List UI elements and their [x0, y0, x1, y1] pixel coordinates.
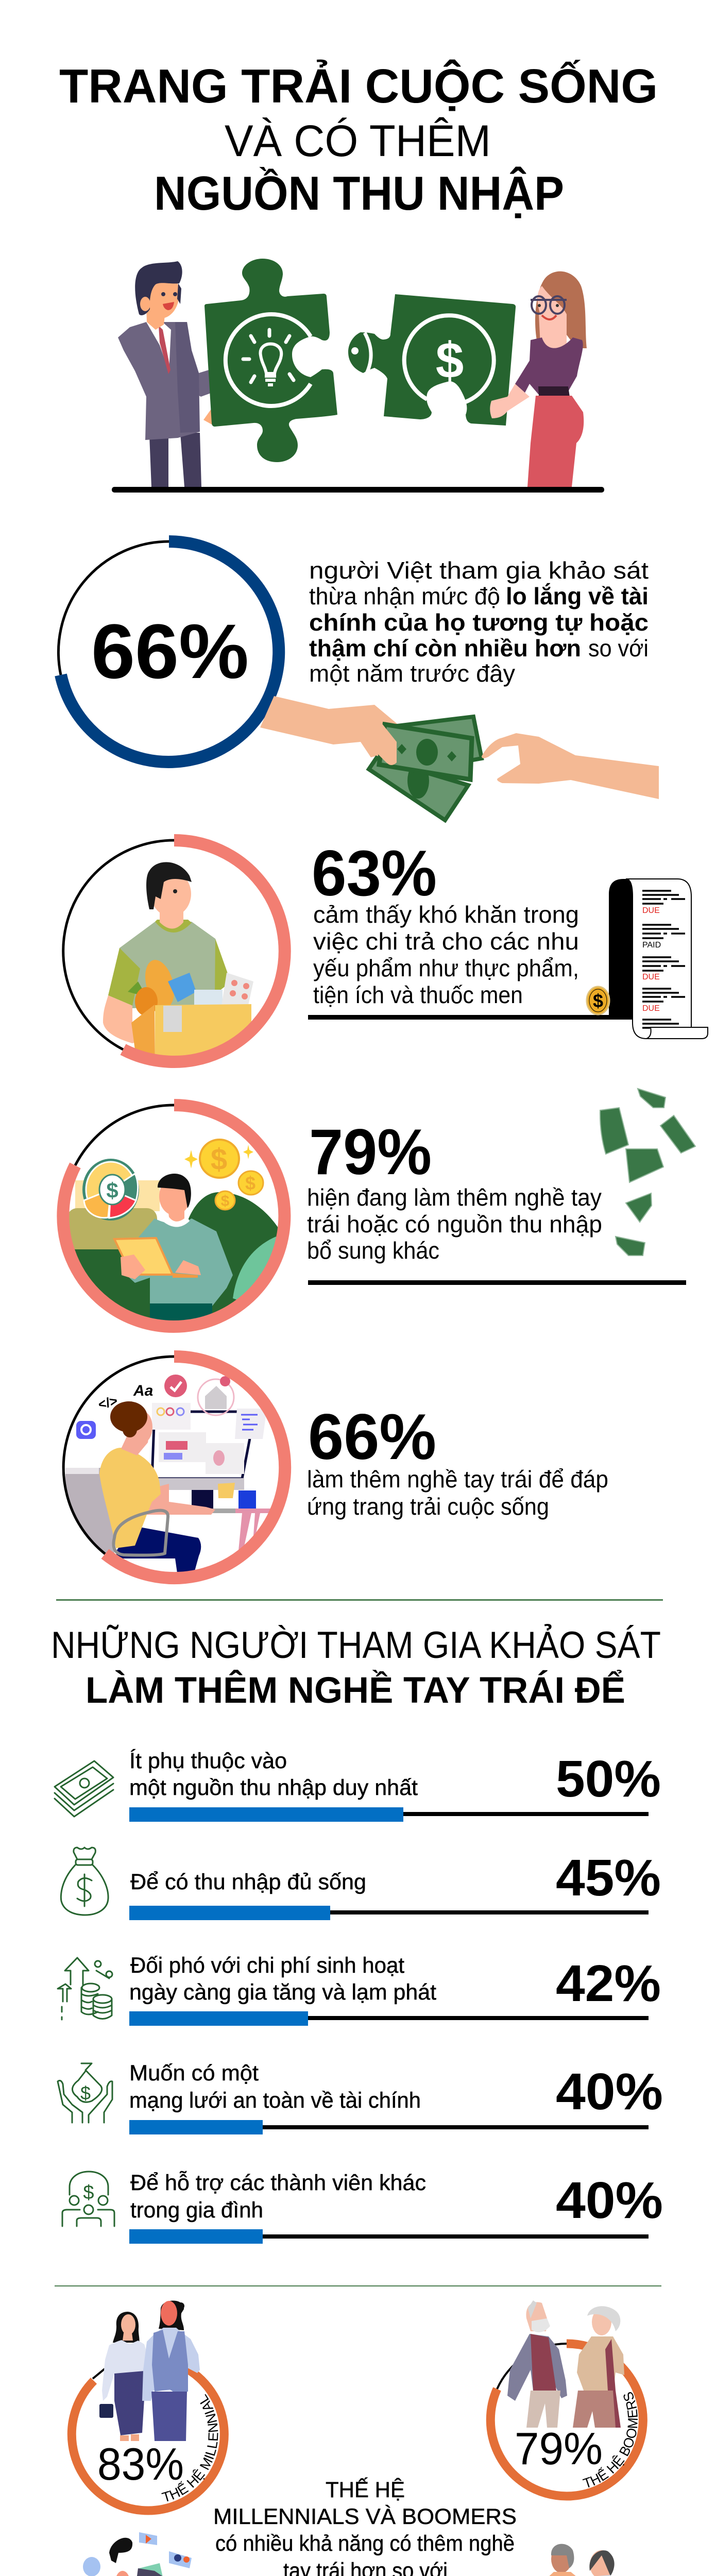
label: Để có thu nhập đủ sống [130, 1870, 366, 1894]
description: 63% [312, 838, 437, 909]
generation: Gen X 67% [549, 2544, 615, 2576]
description: làm thêm nghề tay trái để đáp [307, 1466, 608, 1493]
value: 83% [97, 2438, 184, 2489]
bar 45% [129, 1906, 649, 1920]
receipt roll with coin [587, 879, 708, 1039]
reason row: 45% [61, 1848, 661, 1920]
reason row: 50% [55, 1749, 661, 1822]
ring chart [72, 2358, 224, 2511]
ring chart [490, 2344, 643, 2496]
description: người Việt tham gia khảo sát [309, 557, 649, 584]
reason row: 40% family support [62, 2171, 663, 2244]
title: NGUỒN THU NHẬP [154, 166, 564, 220]
right puzzle piece with dollar [348, 294, 516, 426]
description: so với [588, 635, 649, 662]
value: 40% [556, 2172, 663, 2229]
title [59, 59, 658, 220]
hero illustration: people joining puzzle pieces [112, 259, 604, 493]
bar 40% [129, 2229, 649, 2244]
illustration: person at computer: Aa [133, 1382, 153, 1399]
base bar [308, 1015, 633, 1020]
people: millennial couple [99, 2301, 200, 2441]
label: ngày càng gia tăng và lạm phát [129, 1980, 436, 2005]
description: việc chi trả cho các nhu [313, 928, 579, 955]
label: Đối phó với chi phí sinh hoạt [130, 1953, 404, 1978]
label: Ít phụ thuộc vào [129, 1749, 287, 1773]
reason row: 40% safety net [58, 2061, 663, 2134]
ring chart 79% [63, 1105, 284, 1327]
generation summary text: THẾ HỆ [326, 2478, 405, 2502]
description: một năm trước đây [309, 660, 515, 687]
illustration: man with laptop and coins: $ [221, 1193, 230, 1210]
icon: family and money: $ [83, 2182, 94, 2204]
flying banknotes [600, 1089, 695, 1256]
title: VÀ CÓ THÊM [225, 116, 491, 166]
stat panel: 66% worried about finances [58, 541, 659, 820]
heading: reasons for side hustle [51, 1624, 661, 1711]
description [307, 1116, 602, 1264]
bar 40% [129, 2120, 649, 2134]
illustration: person at computer [65, 1375, 270, 1577]
stat panel: 66% side hustle for living costs [63, 1357, 608, 1578]
bar 42% [129, 2011, 649, 2026]
icon: hands protecting money [58, 2063, 112, 2123]
ring chart 66% [63, 1357, 285, 1578]
receipt roll with coin: $ [593, 990, 603, 1011]
receipt roll with coin: DUE [642, 906, 660, 915]
stat panel: 79% have a side hustle [63, 1089, 695, 1340]
illustration: man with laptop and coins: $ [211, 1143, 227, 1176]
generation summary text: có nhiều khả năng có thêm nghề [215, 2531, 515, 2556]
description: hiện đang làm thêm nghề tay [307, 1184, 602, 1211]
label [129, 2061, 421, 2113]
label: Muốn có một [129, 2061, 259, 2086]
description: trái hoặc có nguồn thu nhập [307, 1211, 602, 1238]
receipt roll with coin: PAID [642, 941, 661, 950]
description: yếu phẩm như thực phẩm, [313, 955, 579, 981]
description: 66% [308, 1401, 436, 1473]
ground line [112, 487, 604, 493]
icon: hands protecting money: $ [80, 2082, 91, 2104]
description: thậm chí còn nhiều hơn [309, 635, 581, 662]
label: mạng lưới an toàn về tài chính [129, 2088, 421, 2113]
label: trong gia đình [130, 2198, 263, 2223]
value: 45% [556, 1849, 661, 1907]
curved label: THẾ HỆ BOOMERS [582, 2392, 638, 2487]
receipt roll with coin: DUE [642, 1004, 660, 1013]
heading: reasons for side hustle: NHỮNG NGƯỜI THAM GIA KHẢO SÁT [51, 1624, 661, 1666]
generation: Boomers 79% [486, 2300, 647, 2501]
base bar [308, 1280, 686, 1285]
description: 79% [309, 1116, 432, 1188]
stat panel: 63% struggle to pay essentials [63, 838, 708, 1066]
label: Để hỗ trợ các thành viên khác [130, 2171, 426, 2195]
title: TRANG TRẢI CUỘC SỐNG [59, 59, 658, 113]
bar 50% [129, 1807, 649, 1822]
label: một nguồn thu nhập duy nhất [129, 1775, 418, 1800]
generation summary text: MILLENNIALS VÀ BOOMERS [213, 2504, 517, 2529]
illustration: person at computer: </> [96, 1393, 119, 1412]
hands exchanging money [260, 696, 659, 820]
ring chart 63% [63, 840, 285, 1062]
description: chính của họ tương tự hoặc [309, 609, 649, 636]
illustration: man carrying grocery box [103, 862, 253, 1066]
value: 50% [556, 1750, 661, 1808]
description: cảm thấy khó khăn trong [313, 901, 579, 928]
ring chart 66% [58, 541, 279, 762]
woman [490, 272, 587, 487]
icon: money bag [61, 1848, 108, 1915]
people: gen z couple with VR headset [83, 2532, 192, 2576]
value: 79% [515, 2423, 603, 2474]
description [307, 1401, 608, 1520]
illustration: man with laptop and coins: $ [106, 1178, 118, 1202]
description: thừa nhận mức độ [309, 583, 500, 609]
right puzzle piece with dollar: $ [436, 332, 464, 388]
description [312, 838, 579, 1008]
description: ứng trang trải cuộc sống [307, 1493, 549, 1520]
generation: Millennials 83% [67, 2301, 229, 2515]
description: lo lắng về tài [506, 583, 649, 609]
people: gen x couple with laptop [517, 2544, 628, 2576]
illustration: man with laptop and coins [69, 1139, 278, 1320]
description: bổ sung khác [307, 1237, 439, 1264]
heading: reasons for side hustle: LÀM THÊM NGHỀ TAY TRÁI ĐỂ [86, 1670, 625, 1711]
illustration: man with laptop and coins: $ [245, 1173, 255, 1194]
left puzzle piece with light bulb [204, 259, 337, 462]
label [129, 1749, 418, 1800]
reason row: 42% [58, 1953, 661, 2026]
value: 42% [556, 1955, 661, 2012]
icon: family and money [62, 2172, 114, 2226]
icon: rising arrows and coins [58, 1958, 112, 2020]
label [130, 2171, 426, 2223]
receipt roll with coin: DUE [642, 973, 660, 981]
icon: banknotes [55, 1761, 113, 1817]
people: elderly couple [507, 2300, 624, 2428]
generation summary text [213, 2478, 517, 2576]
description [309, 557, 649, 687]
ring chart 66%: 66% [91, 608, 249, 694]
man with suit [118, 261, 235, 487]
generation: Gen Z 76% [83, 2532, 192, 2576]
description: tiện ích và thuốc men [313, 981, 523, 1008]
label [129, 1953, 436, 2005]
value: 40% [556, 2063, 663, 2121]
curved label: THẾ HỆ MILLENNIALS [161, 2394, 218, 2502]
